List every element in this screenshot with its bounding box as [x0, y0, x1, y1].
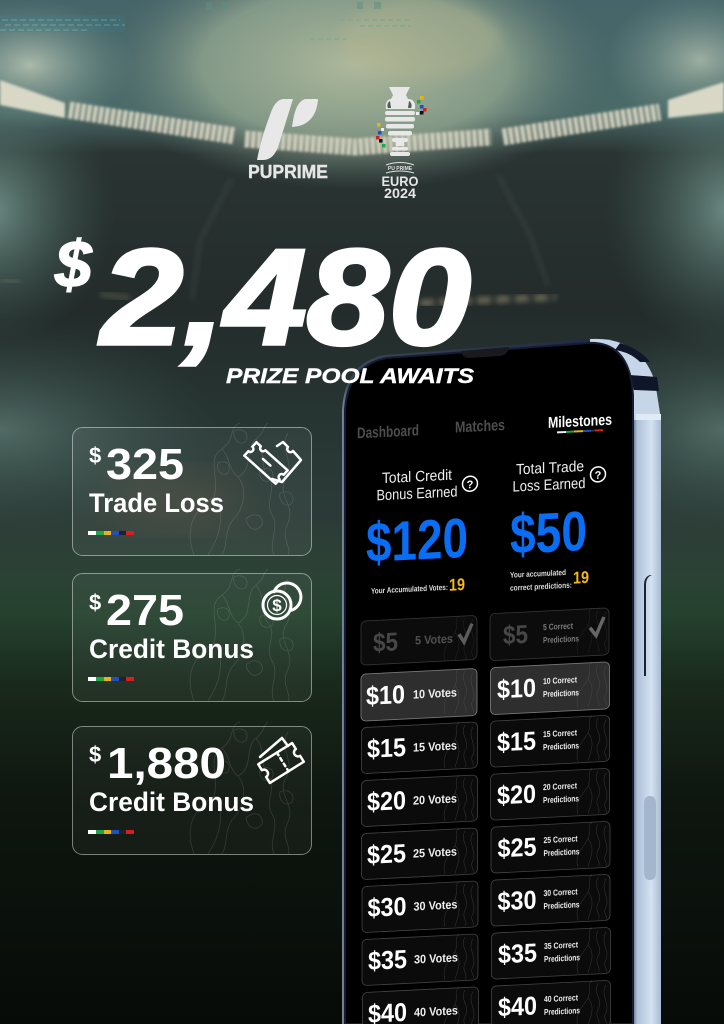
milestone: $30 30 Correct Predictions: Predictions [544, 899, 580, 911]
milestone: $40 40 Correct Predictions [492, 980, 610, 1024]
milestone: $40 40 Correct Predictions: 40 Correct [544, 992, 578, 1004]
milestone: $35 30 Votes: $35 [368, 944, 407, 976]
tabs: Milestones [548, 412, 612, 432]
phone side button [644, 575, 652, 676]
panel: $1,880 credit bonus: Credit Bonus [89, 787, 254, 817]
milestone: $30 30 Votes: 30 Votes [414, 897, 458, 914]
panel: $1,880 credit bonus: 1,880 [107, 739, 226, 788]
stat: total credit bonus: Your Accumulated Votes: [371, 583, 448, 596]
milestone: $5 5 Correct Predictions: $5 [503, 619, 528, 650]
logo: Euro 2024 trophy: 2024 [384, 185, 416, 201]
milestones right column: correct predictions [490, 607, 610, 1024]
headline: prize amount: $ [54, 227, 93, 301]
stat: total trade loss: Your accumulated [510, 568, 566, 580]
milestone: $15 15 Votes: 15 Votes [413, 738, 457, 755]
phone screen content [357, 412, 612, 1024]
colour stripe [88, 677, 134, 681]
phone frame dark antenna stripes [615, 343, 659, 391]
milestone: $25 25 Votes [362, 827, 478, 880]
milestone: $5 5 Votes: $5 [373, 626, 398, 658]
milestone: $20 20 Correct Predictions [490, 768, 610, 820]
logo: Euro 2024 trophy [376, 87, 426, 201]
milestone: $35 35 Correct Predictions: Predictions [544, 952, 580, 964]
phone antenna band [636, 414, 661, 420]
panel: $275 credit bonus: 275 [106, 586, 184, 635]
milestone: $10 10 Votes (active) [361, 667, 477, 721]
milestone: $10 10 Correct Predictions (active): $10 [497, 672, 536, 704]
milestone: $25 25 Votes: 25 Votes [413, 844, 457, 861]
stat: total trade loss: $50 [510, 499, 587, 566]
milestone: $5 5 Votes [361, 614, 477, 665]
stadium floodlights [0, 80, 724, 147]
active tab underline [557, 429, 603, 433]
milestone: $40 40 Correct Predictions: Predictions [544, 1005, 580, 1017]
stat: total trade loss: Total Trade [516, 458, 584, 478]
icon: tickets [244, 442, 301, 484]
tabs [357, 412, 612, 442]
subheading: prize pool awaits: PRIZE POOL AWAITS [226, 364, 475, 388]
panel: $325 trade loss [72, 423, 312, 556]
icon: PU Prime P mark [257, 99, 318, 160]
milestone: $25 25 Votes: $25 [367, 838, 406, 870]
stadium roof struts and far lights [0, 175, 556, 303]
milestone: $25 25 Correct Predictions: 25 Correct [544, 833, 578, 845]
milestone: $15 15 Correct Predictions: Predictions [543, 740, 579, 752]
milestone: $20 20 Correct Predictions: 20 Correct [543, 780, 577, 792]
icon: coloured pixels [376, 96, 426, 148]
milestone: $35 35 Correct Predictions: $35 [498, 937, 537, 969]
milestone: $30 30 Correct Predictions: $30 [498, 884, 537, 916]
milestone: $15 15 Correct Predictions: 15 Correct [543, 727, 577, 739]
panel: $275 credit bonus: $ [89, 590, 101, 615]
stat: total trade loss [510, 457, 606, 593]
milestone: $20 20 Votes: $20 [367, 785, 406, 817]
stat: total credit bonus: 19 [449, 575, 465, 595]
milestones left column: votes [361, 614, 478, 1024]
milestone: $10 10 Votes (active): $10 [366, 679, 405, 711]
panel: $325 trade loss: $ [89, 443, 101, 468]
panel: $325 trade loss: 325 [106, 440, 184, 489]
milestone: $15 15 Correct Predictions [490, 715, 610, 767]
phone lower side button [644, 796, 656, 880]
stat: total credit bonus: Bonus Earned [376, 483, 457, 504]
phone [342, 339, 661, 1024]
icon: question mark: ? [595, 470, 602, 482]
milestone: $40 40 Votes: 40 Votes [414, 1003, 458, 1020]
milestone: $35 30 Votes [362, 933, 478, 986]
milestone: $20 20 Correct Predictions: Predictions [543, 793, 579, 805]
milestone: $5 5 Correct Predictions: 5 Correct [543, 621, 573, 632]
tabs: Matches [455, 417, 505, 436]
icon: coins [263, 583, 301, 619]
milestone: $30 30 Correct Predictions [491, 874, 610, 926]
icon: question mark: ? [467, 479, 474, 491]
milestone: $10 10 Correct Predictions (active): 10 Correct [543, 674, 577, 686]
milestone: $35 35 Correct Predictions [492, 927, 610, 979]
label: EURO 2024: EURO [382, 173, 419, 189]
panel: $1,880 credit bonus [72, 722, 312, 854]
milestone: $25 25 Correct Predictions: Predictions [544, 846, 580, 858]
headline: prize amount: 2,480 [98, 221, 471, 373]
milestone: $5 5 Correct Predictions [490, 607, 609, 661]
wordmark: PUPRIME: PUPRIME [248, 162, 328, 182]
milestone: $20 20 Votes: 20 Votes [413, 791, 457, 808]
milestone: $10 10 Correct Predictions (active) [490, 661, 610, 715]
milestone: $20 20 Votes [362, 774, 478, 827]
icon: tickets [258, 738, 304, 783]
milestone: $25 25 Correct Predictions: $25 [498, 831, 537, 863]
logo: PU Prime [248, 99, 328, 182]
stat: total credit bonus: Total Credit [382, 467, 453, 487]
milestone: $10 10 Correct Predictions (active): Predictions [543, 687, 579, 699]
colour stripe [88, 531, 134, 535]
tabs: Dashboard [357, 422, 419, 442]
phone frame light corner [590, 339, 661, 420]
icon: trophy [385, 87, 415, 156]
milestone: $40 40 Correct Predictions: $40 [498, 990, 537, 1022]
panel: $325 trade loss: Trade Loss [89, 488, 224, 518]
panel: $275 credit bonus [72, 569, 312, 702]
milestone: $20 20 Correct Predictions: $20 [497, 778, 536, 810]
milestone: $25 25 Correct Predictions [491, 821, 610, 873]
milestone: $30 30 Correct Predictions: 30 Correct [544, 886, 578, 898]
stat: total credit bonus: $120 [366, 506, 468, 574]
milestone: $35 30 Votes: 30 Votes [414, 950, 458, 967]
milestone: $40 40 Votes [362, 986, 478, 1024]
icon: coins: $ [272, 596, 282, 615]
milestone: $15 15 Votes [362, 721, 478, 774]
colour stripe [88, 830, 134, 834]
milestone: $30 30 Votes: $30 [368, 891, 407, 923]
milestone: $5 5 Votes: 5 Votes [415, 632, 453, 647]
panel: $1,880 credit bonus: $ [89, 742, 101, 767]
milestone: $5 5 Correct Predictions: Predictions [543, 633, 579, 645]
milestone: $30 30 Votes [362, 880, 478, 933]
phone frame [342, 339, 661, 1024]
stat: total trade loss: Loss Earned [512, 475, 585, 496]
panel: $275 credit bonus: Credit Bonus [89, 634, 254, 664]
label: PU PRIME banner: PU PRIME [388, 166, 413, 172]
milestone: $10 10 Votes (active): 10 Votes [413, 685, 457, 702]
milestone: $15 15 Correct Predictions: $15 [497, 725, 536, 757]
stat: total trade loss: 19 [573, 568, 589, 588]
video glitch noise at top [0, 2, 410, 39]
stat: total credit bonus [366, 465, 478, 599]
phone screen [345, 343, 633, 1024]
milestone: $35 35 Correct Predictions: 35 Correct [544, 939, 578, 951]
stat: total trade loss: correct predictions: [510, 581, 572, 593]
milestone: $15 15 Votes: $15 [367, 732, 406, 764]
notch [461, 347, 509, 358]
